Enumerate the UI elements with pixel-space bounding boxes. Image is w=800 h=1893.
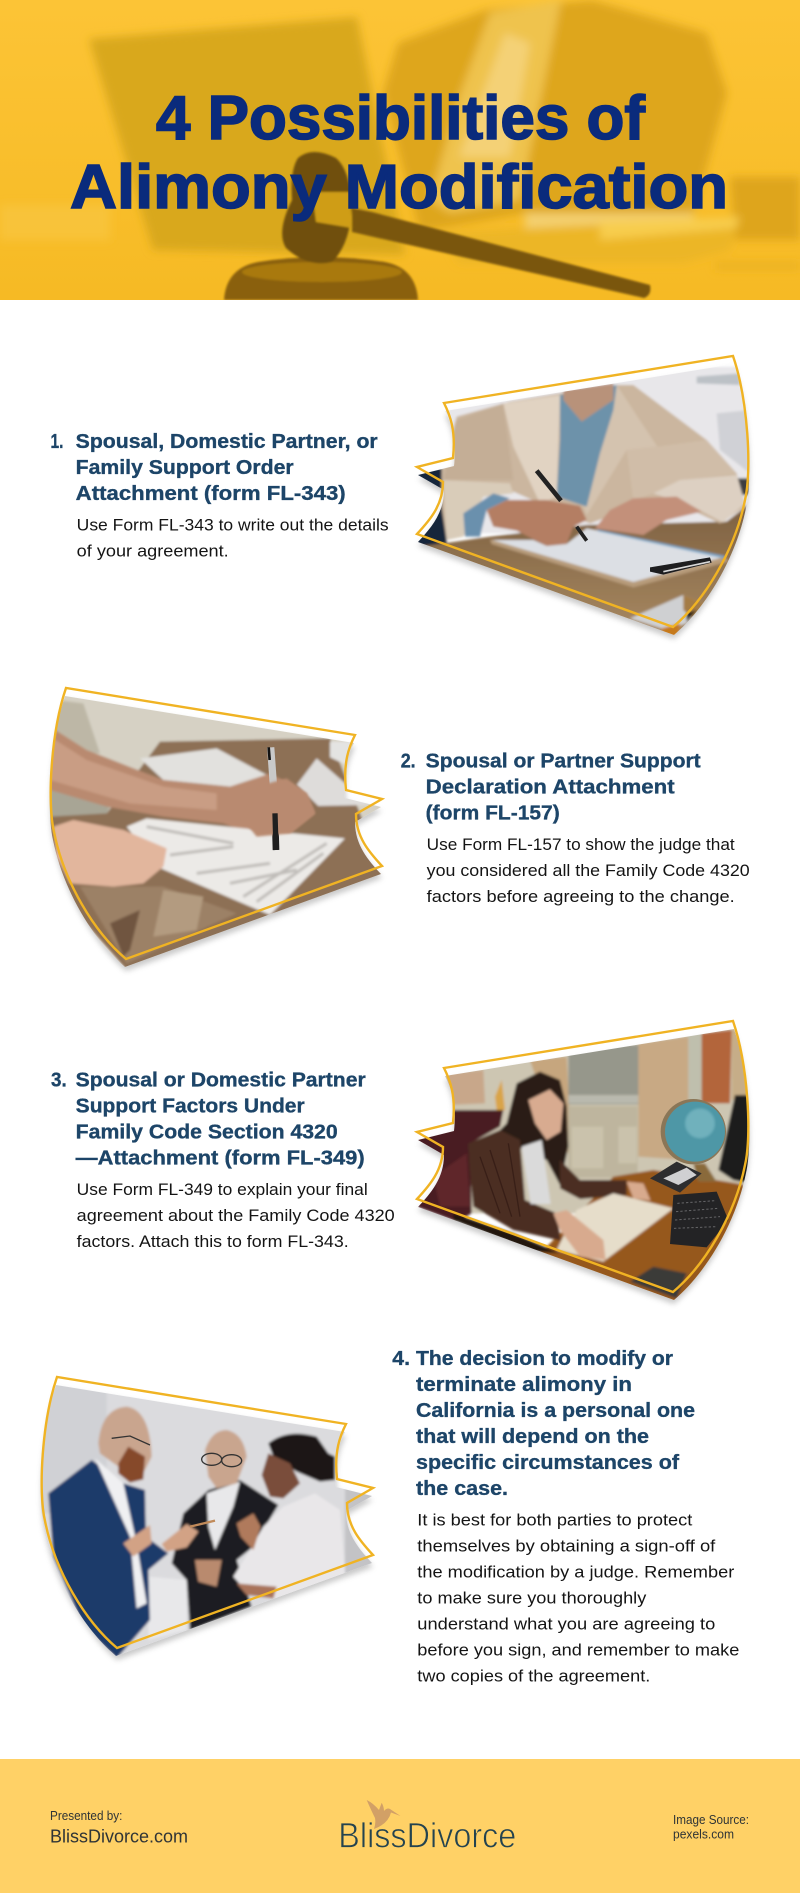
heading: step 4: specific circumstances of [416,1451,679,1474]
heading: step 1 [50,430,378,505]
text: step 2 body: factors before agreeing to the change. [427,888,735,906]
photo: woman at office desk with globe [410,1015,760,1315]
text: step 4 body [417,1511,739,1685]
presented by [50,1809,188,1847]
gold outline [42,1377,373,1648]
title [70,84,728,222]
heading: step 1: Attachment (form FL-343) [76,482,346,505]
photo: woman signing on clipboard [410,350,760,650]
heading: step 4: The decision to modify or [416,1347,673,1370]
presented by: Presented by: [50,1809,122,1823]
heading: step 1: Spousal, Domestic Partner, or [76,430,378,453]
panel: step 3 [51,1015,760,1315]
image source [673,1813,749,1842]
text: step 4 body: themselves by obtaining a sign-off of [417,1537,716,1555]
heading: step 4: 4. [392,1347,410,1370]
gold outline [417,356,748,627]
text: step 1 body: Use Form FL-343 to write out the details [77,517,389,535]
heading: step 2 [401,749,701,824]
text: step 1 body: of your agreement. [77,543,229,561]
text: step 3 body: agreement about the Family Code 4320 [77,1207,395,1225]
heading: step 3: Spousal or Domestic Partner [76,1069,366,1092]
text: step 2 body [427,836,750,906]
heading: step 4 [392,1347,695,1500]
heading: step 2: Declaration Attachment [426,775,675,798]
keyboard and desk items sit sharper than the backdrop [670,1192,728,1247]
image source: pexels.com [673,1828,734,1842]
icon: hummingbird [367,1800,400,1829]
photo: three people talking [30,1370,380,1660]
heading: step 3: Support Factors Under [76,1095,305,1118]
photo: hands signing paper on wood desk [40,680,390,971]
wordmark: BlissDivorce [338,1816,516,1855]
banner: gavel photo with yellow overlay [0,0,800,300]
panel: step 1 [50,350,760,650]
presented by: BlissDivorce.com [50,1827,188,1847]
heading: step 4: the case. [416,1477,508,1500]
text: step 4 body: understand what you are agreeing to [417,1615,715,1633]
logo: BlissDivorce [338,1800,516,1855]
text: step 4 body: to make sure you thoroughly [417,1589,647,1607]
panel: step 4 [30,1347,739,1685]
text: step 4 body: It is best for both parties to protect [417,1511,693,1529]
heading: step 3: Family Code Section 4320 [76,1121,338,1144]
text: step 1 body [77,517,389,561]
text: step 4 body: before you sign, and remember to make [417,1641,739,1659]
heading: step 4: California is a personal one [416,1399,695,1422]
heading: step 3: 3. [51,1069,67,1092]
text: step 2 body: you considered all the Family Code 4320 [427,862,750,880]
image source: Image Source: [673,1813,749,1827]
heading: step 1: Family Support Order [76,456,294,479]
heading: step 4: terminate alimony in [416,1373,632,1396]
heading: step 4: that will depend on the [416,1425,649,1448]
footer band [0,1759,800,1893]
text: step 4 body: two copies of the agreement. [417,1667,650,1685]
panel: step 2 [40,680,750,971]
heading: step 3 [51,1069,366,1170]
text: step 3 body: factors. Attach this to form FL-343. [77,1233,349,1251]
heading: step 1: 1. [50,430,64,453]
heading: step 2: Spousal or Partner Support [426,749,701,772]
heading: step 2: 2. [401,749,416,772]
title: Alimony Modification [70,153,728,222]
text: step 3 body [77,1181,395,1251]
gold outline [51,688,382,959]
text: step 4 body: the modification by a judge. Remember [417,1563,735,1581]
gold outline [417,1021,748,1292]
title: 4 Possibilities of [156,84,645,153]
heading: step 3: —Attachment (form FL-349) [76,1147,365,1170]
text: step 3 body: Use Form FL-349 to explain your final [77,1181,368,1199]
heading: step 2: (form FL-157) [426,801,560,824]
text: step 2 body: Use Form FL-157 to show the judge that [427,836,735,854]
